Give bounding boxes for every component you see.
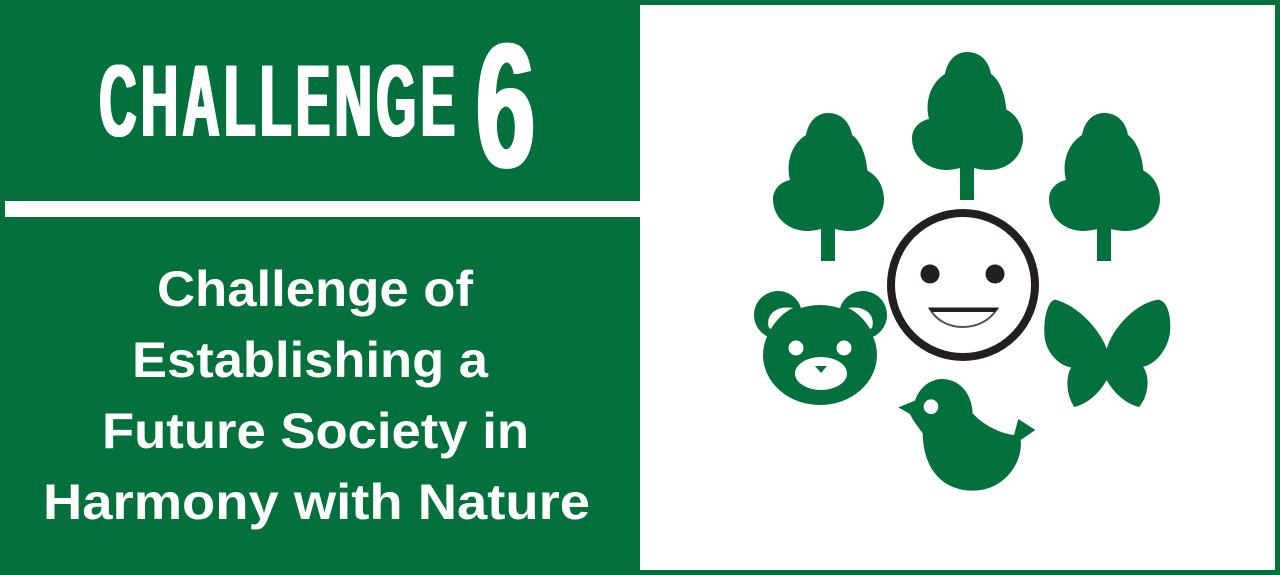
subtitle text: Harmony with Nature (43, 474, 590, 530)
icon: right tree (1049, 113, 1160, 261)
icon: bird (898, 379, 1035, 491)
heading: challenge 6: CHALLENGE (98, 44, 458, 158)
icon: centre tree (912, 52, 1023, 200)
subtitle text (43, 261, 590, 530)
subtitle text: Establishing a (132, 332, 489, 388)
icon: left tree (773, 113, 884, 261)
subtitle text: Future Society in (102, 403, 529, 459)
icon: smiling face (891, 213, 1035, 357)
subtitle text: Challenge of (157, 261, 473, 317)
heading: challenge 6: 6 (474, 6, 533, 205)
icon: bear (754, 291, 887, 405)
panel: illustration (640, 5, 1275, 570)
icon: butterfly (1045, 300, 1170, 407)
divider bar (5, 201, 640, 217)
heading: challenge 6 (98, 6, 534, 205)
